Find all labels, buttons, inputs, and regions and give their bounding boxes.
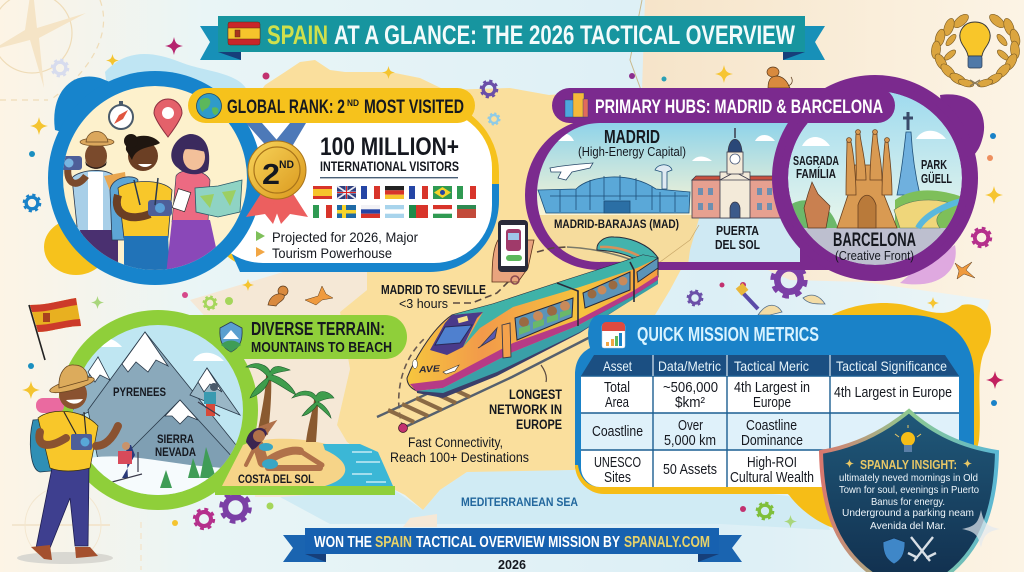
icon: phone in hand [492, 220, 534, 284]
illustration: hiker [17, 365, 118, 564]
Sagrada Família [837, 130, 897, 228]
title text: AT A GLANCE: THE 2026 TACTICAL OVERVIEW [334, 20, 795, 50]
decorative gears [24, 60, 991, 529]
clouds [101, 339, 224, 361]
illustration: three travellers [60, 99, 242, 275]
header pill [552, 88, 895, 123]
banner text: SPAIN [375, 534, 412, 551]
backpack [30, 398, 64, 472]
table row: UNESCO sites: High-ROI [747, 455, 797, 471]
banner text: WON THE [314, 534, 372, 551]
panel: Spanaly insight shield [821, 411, 1000, 572]
visitors headline: INTERNATIONAL VISITORS [320, 159, 459, 174]
insight text: Avenida del Mar. [870, 520, 946, 532]
icon: flag on a pole [29, 298, 81, 360]
icon: Spanish flag [228, 22, 260, 45]
clouds [802, 131, 946, 146]
airport terminal [538, 165, 690, 213]
place labels [113, 385, 314, 486]
insight text: Underground a parking neam [842, 507, 974, 519]
Barcelona labels [793, 153, 952, 263]
table row: coastline: Coastline [592, 424, 643, 440]
header text: MOST VISITED [364, 97, 464, 118]
second window with passengers [583, 272, 630, 308]
Madrid labels: (High-Energy Capital) [578, 144, 686, 159]
row two [313, 205, 476, 218]
lower magenta stripe [410, 275, 658, 391]
Madrid labels: MADRID-BARAJAS (MAD) [554, 217, 679, 231]
sky and ground [788, 92, 962, 265]
window with passengers [515, 298, 573, 340]
table row: coastline: Coastline [746, 418, 797, 434]
panel frame [48, 71, 499, 285]
Madrid scene [530, 120, 800, 265]
route labels [381, 283, 486, 311]
place labels: COSTA DEL SOL [238, 472, 314, 486]
sky and ground [530, 120, 800, 265]
flag rows [313, 186, 476, 218]
insight text: Banus for energy. [871, 496, 945, 508]
shirt [38, 411, 98, 471]
table row: total area [604, 380, 952, 411]
icon: crossed swords [908, 537, 936, 561]
map: coast shading of the sea [280, 470, 830, 530]
map: France and eastern land [642, 0, 1024, 572]
callout: fast connectivity: Fast Connectivity, [408, 435, 503, 450]
projection notes: Tourism Powerhouse [272, 245, 392, 261]
table header row: Tactical Significance [836, 358, 947, 374]
panel frame [575, 315, 974, 494]
table row: UNESCO sites: Cultural Wealth [730, 470, 814, 486]
banner text [314, 534, 710, 551]
footer year: 2026 [498, 557, 526, 572]
panel heading: QUICK MISSION METRICS [637, 324, 819, 346]
projection notes [256, 229, 418, 261]
sunbathing woman [246, 424, 322, 469]
panel: global rank [44, 54, 499, 285]
header text [227, 97, 464, 118]
track [377, 332, 600, 432]
icon: small dog [268, 286, 288, 306]
banner text: SPANALY.COM [624, 534, 710, 551]
header text: PRIMARY HUBS: MADRID & BARCELONA [595, 97, 883, 118]
headlights and AVE mark [412, 316, 468, 375]
panel frame [525, 94, 984, 270]
table header row [603, 358, 947, 374]
table header row: Tactical Meric [734, 358, 809, 374]
icon: cat on the map [767, 67, 792, 88]
map: upper coast line [630, 0, 642, 90]
icon: small shield [883, 538, 905, 564]
table row: UNESCO sites: 50 Assets [663, 462, 717, 478]
panel: primary hubs [525, 75, 984, 284]
route labels: MADRID TO SEVILLE [381, 283, 486, 297]
callout: longest network: NETWORK IN [489, 402, 562, 417]
banner text: TACTICAL OVERVIEW MISSION BY [416, 534, 621, 551]
icon: 2nd place medal: ND [279, 159, 294, 171]
insight text [839, 472, 979, 532]
camera [64, 412, 92, 450]
palm trees [246, 364, 334, 442]
data table [581, 355, 959, 487]
map: Spain mainland [240, 60, 730, 510]
panel: quick mission metrics [575, 303, 991, 530]
table row: UNESCO sites [594, 455, 814, 486]
icon: orange bird [305, 286, 333, 305]
header text: DIVERSE TERRAIN: [251, 319, 385, 339]
table header row: Asset [603, 358, 632, 374]
illustration: high-speed train [377, 237, 658, 432]
icon: compass [109, 101, 133, 129]
sand and sea [222, 439, 393, 486]
yellow blob [780, 303, 991, 530]
rear curving carriage [567, 237, 658, 262]
Barcelona labels: GÜELL [921, 171, 952, 186]
arrow: dashed route around train nose [399, 338, 425, 428]
callout: fast connectivity [390, 435, 529, 465]
Barcelona circle [772, 75, 978, 281]
lilac blob [900, 245, 956, 284]
carriage joints [557, 262, 634, 326]
table row: coastline [592, 418, 803, 449]
fir trees [160, 447, 216, 488]
header text: GLOBAL RANK: 2 [227, 97, 345, 118]
table row: total area: $km² [675, 395, 705, 411]
header text: MOUNTAINS TO BEACH [251, 339, 392, 356]
icon: calendar chart [602, 322, 625, 348]
icon: terrain shield [220, 322, 242, 352]
Madrid labels: MADRID [604, 127, 660, 147]
callout: longest network [489, 365, 563, 432]
Barcelona labels: PARK [921, 157, 947, 172]
callout: longest network: EUROPE [516, 417, 562, 432]
clouds [555, 133, 775, 161]
icon: orange starfish [955, 262, 975, 279]
table row: total area: 4th Largest in Europe [834, 385, 952, 401]
visitors headline: 100 MILLION+ [320, 133, 459, 161]
windshield [435, 325, 472, 345]
row one [313, 186, 476, 199]
underbody [417, 270, 658, 398]
Madrid labels: PUERTA [716, 223, 759, 238]
visitors headline [320, 133, 459, 178]
panel: diverse terrain [58, 310, 407, 510]
callout: fast connectivity: Reach 100+ Destinations [390, 450, 529, 465]
third window [637, 258, 658, 282]
Barcelona labels: (Creative Front) [835, 248, 914, 263]
Barcelona labels: FAMÍLIA [796, 166, 836, 181]
roof teal band [452, 255, 658, 347]
table row: coastline: Dominance [741, 433, 803, 449]
projection notes: Projected for 2026, Major [272, 229, 418, 245]
icon: globe [196, 94, 222, 118]
legs and boots [31, 468, 98, 560]
insight text: ultimately neved mornings in Old [839, 472, 978, 484]
decorative compass bottom left [12, 487, 141, 570]
header text [251, 319, 392, 356]
Barcelona labels: BARCELONA [833, 230, 916, 251]
shield shape [821, 411, 997, 572]
cab front purple [430, 312, 483, 355]
map: Portugal and western land [190, 272, 393, 497]
sea label: MEDITERRANEAN SEA [461, 495, 578, 509]
map: African coast [403, 514, 437, 527]
title text [267, 20, 795, 50]
table cells [581, 355, 959, 487]
sky [70, 322, 250, 497]
arrow: dashed route to Seville [453, 247, 567, 303]
beach scene [222, 364, 393, 486]
icon: 2nd place medal: 2 [262, 159, 280, 191]
carriage body [407, 255, 658, 391]
table row: total area: Europe [753, 395, 791, 411]
mountain scene [73, 325, 243, 495]
peaks [68, 332, 240, 480]
icon: 2nd place medal [246, 123, 308, 224]
sparkle [962, 510, 1000, 548]
icon: little island shapes [758, 295, 825, 315]
panel backing blobs [44, 54, 248, 275]
icon: insight bulb [895, 425, 921, 452]
header text: ND [347, 98, 359, 108]
headlights and AVE mark: AVE [417, 363, 441, 375]
header pill [188, 88, 475, 123]
skiers [112, 383, 220, 482]
icon: airplane [550, 163, 593, 180]
Barcelona labels: SAGRADA [793, 153, 839, 168]
title banner [200, 16, 825, 60]
banner ribbon [200, 16, 825, 60]
place labels: NEVADA [155, 445, 196, 459]
head and hat [48, 365, 96, 409]
title text: SPAIN [267, 20, 328, 50]
lower teal stripe [416, 280, 658, 393]
snowfield [91, 456, 220, 495]
callout: longest network: LONGEST [509, 387, 563, 402]
decorative compass top left [0, 0, 104, 100]
Puerta del Sol building [691, 128, 780, 218]
Madrid labels [554, 127, 760, 252]
traveller with hat [63, 131, 126, 262]
place labels: SIERRA [157, 432, 194, 446]
banner ribbon [283, 528, 742, 562]
table row: total area: ~506,000 [663, 380, 718, 396]
insight heading: SPANALY INSIGHT: [860, 457, 957, 472]
table row: UNESCO sites: Sites [604, 470, 631, 486]
table row: coastline: 5,000 km [664, 433, 716, 449]
gardens [790, 182, 965, 228]
table row: UNESCO sites: UNESCO [594, 455, 641, 471]
table row: total area: 4th Largest in [734, 380, 810, 396]
traveller with backpack [110, 134, 172, 275]
table row: total area: Area [605, 395, 630, 411]
icon: city buildings [565, 93, 588, 117]
place labels: PYRENEES [113, 385, 166, 399]
Park Güell tower [897, 112, 920, 195]
insight text: Town for soul, evenings in Puerto [839, 484, 979, 496]
Madrid labels: DEL SOL [715, 237, 760, 252]
icon: map pin [154, 99, 182, 137]
traveller with map [166, 134, 242, 275]
arms [39, 426, 118, 446]
table row: coastline: Over [678, 418, 703, 434]
route labels: <3 hours [399, 296, 448, 311]
panel frame [58, 310, 407, 510]
table row: total area: Total [604, 380, 630, 396]
icon: plug [736, 283, 758, 309]
footer banner [283, 528, 742, 562]
table header row: Data/Metric [658, 358, 721, 374]
icon: laurel and light bulb [931, 12, 1022, 88]
carriage door and side window [478, 323, 511, 358]
